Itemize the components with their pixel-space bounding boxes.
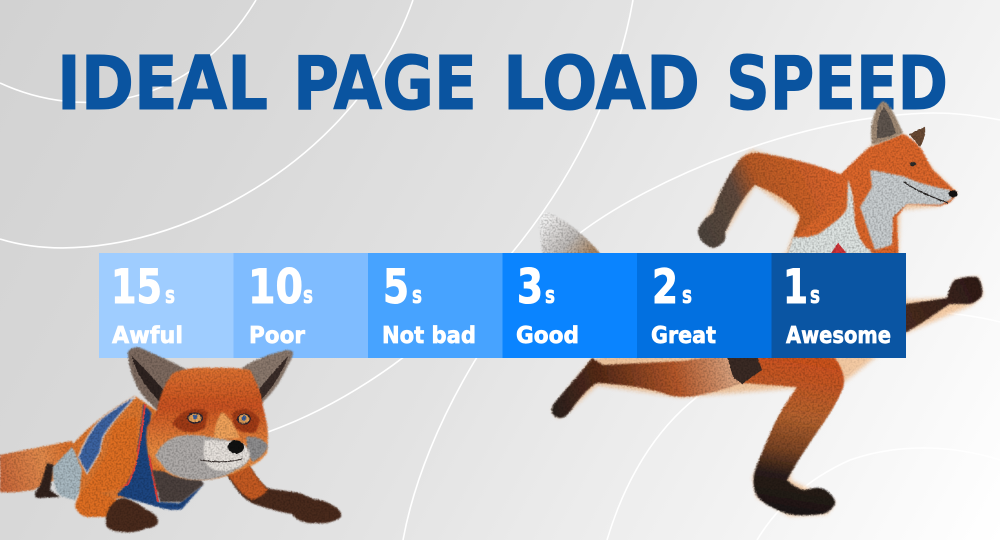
singlet piping [118, 404, 158, 502]
front paw [106, 498, 158, 532]
small ear [909, 127, 925, 147]
grey face [860, 170, 952, 250]
body [72, 396, 170, 505]
right inner ear [255, 356, 288, 399]
tail [0, 441, 85, 492]
front singlet [117, 404, 204, 510]
10 seconds poor [234, 253, 368, 358]
illustration: running fox [540, 101, 983, 516]
blue back singlet [78, 396, 136, 474]
10 seconds poor: s [303, 281, 313, 309]
right arm orange [228, 458, 268, 500]
2 seconds great [637, 253, 772, 358]
front arm [698, 153, 850, 256]
title: SPEED [726, 41, 948, 127]
right eye [237, 414, 251, 424]
15 seconds awful: Awful [112, 323, 183, 349]
big ear [871, 101, 903, 145]
title: IDEAL [57, 41, 268, 127]
dark brow right [232, 409, 260, 433]
head and neck [840, 134, 957, 256]
15 seconds awful [99, 253, 234, 358]
left eye [187, 412, 203, 424]
dark brow left [172, 409, 208, 432]
shorts [53, 447, 92, 500]
muzzle [155, 435, 250, 480]
speed scale band [99, 253, 906, 358]
red chevron [829, 243, 849, 256]
3 seconds good: 3 [517, 260, 543, 315]
left inner ear [132, 356, 170, 402]
3 seconds good [502, 253, 637, 358]
1 second awesome: Awesome [786, 323, 891, 349]
chest [152, 470, 204, 502]
white singlet [786, 180, 874, 258]
10 seconds poor: 10 [248, 260, 303, 315]
rear arm [900, 277, 982, 335]
1 second awesome: s [810, 281, 820, 309]
title: LOAD [503, 41, 700, 127]
eye [910, 162, 916, 166]
5 seconds not bad: 5 [383, 260, 409, 315]
tail [540, 212, 604, 258]
2 seconds great: Great [651, 323, 716, 349]
15 seconds awful: s [165, 281, 175, 309]
title: PAGE [293, 41, 477, 127]
head [146, 368, 268, 480]
nose [949, 190, 957, 198]
5 seconds not bad: Not bad [382, 323, 476, 349]
right arm [227, 458, 341, 523]
mouth [200, 459, 242, 462]
inner ear [877, 107, 896, 138]
left ear [128, 347, 187, 410]
3 seconds good: Good [516, 323, 579, 349]
1 second awesome: 1 [783, 260, 808, 315]
5 seconds not bad [368, 253, 502, 358]
right ear [238, 350, 293, 405]
mouth line [904, 182, 948, 203]
front leg [742, 350, 844, 515]
illustration: lying fox [0, 347, 341, 532]
10 seconds poor: Poor [249, 323, 306, 349]
shorts [727, 356, 762, 384]
2 seconds great: 2 [652, 260, 678, 315]
nose [228, 440, 244, 454]
3 seconds good: s [545, 281, 555, 309]
hind paw [35, 463, 60, 498]
5 seconds not bad: s [412, 281, 422, 309]
front leg [75, 417, 137, 517]
right cheek [246, 437, 268, 462]
15 seconds awful: 15 [111, 260, 162, 315]
title [57, 41, 948, 127]
rear leg [552, 352, 760, 418]
1 second awesome [772, 253, 906, 358]
2 seconds great: s [682, 281, 692, 309]
white muzzle [204, 440, 250, 471]
torso [790, 190, 898, 256]
snout [214, 412, 240, 440]
